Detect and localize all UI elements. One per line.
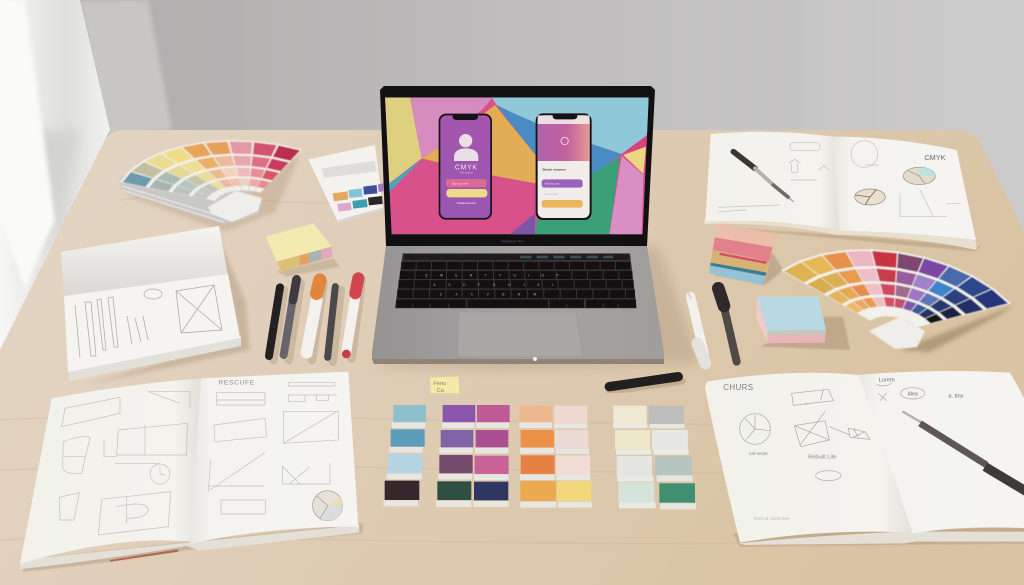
phone mockup: login	[439, 114, 492, 220]
marker: orange	[307, 300, 317, 353]
right page	[857, 371, 1024, 533]
wireframe sketches	[59, 383, 338, 535]
colour fan: left	[101, 128, 332, 232]
keyboard	[395, 253, 637, 308]
marker: black	[269, 287, 280, 356]
wall	[0, 0, 1024, 240]
marker: orange cap	[317, 280, 320, 293]
laptop base	[372, 246, 664, 360]
phone mockup: sign in	[536, 113, 592, 220]
keyboard: QWERTYUIOP	[425, 274, 571, 278]
page heading right: Lorem	[879, 378, 895, 384]
pen	[733, 152, 793, 202]
left page	[705, 373, 913, 543]
inline note: Idea	[907, 391, 918, 397]
wooden table	[0, 130, 1024, 585]
app title: CMYK	[455, 165, 478, 172]
fan rivet end	[869, 317, 925, 349]
black marker lying flat	[609, 377, 682, 391]
laptop lid	[380, 86, 655, 246]
swatch column: blues	[383, 405, 426, 506]
sketches	[718, 141, 960, 217]
sticky note label	[430, 377, 459, 394]
helper line: Need to login	[544, 193, 558, 196]
swatch column: purples	[436, 405, 475, 507]
keyboard: ASDFGHJKL	[433, 283, 567, 287]
avatar icon	[454, 134, 478, 161]
caption left: crit tests	[749, 451, 768, 457]
swatch column: greys and green	[649, 406, 696, 509]
sticky note label: Ca	[437, 388, 445, 394]
marker: grey cap	[293, 279, 297, 300]
form heading: Sketch structure	[542, 168, 566, 172]
group of markers	[269, 278, 362, 362]
swatch column: pale pinks and yellow	[554, 406, 592, 508]
swatch column: creams	[613, 406, 656, 508]
swatch column: magentas	[473, 405, 510, 507]
chart sketches	[740, 383, 925, 481]
tagline: Get started	[460, 171, 473, 175]
purple input: Add account	[545, 182, 560, 186]
marker: red cap	[355, 278, 358, 293]
marker: grey	[284, 280, 296, 355]
marker: dark grey	[328, 287, 335, 357]
pie chart sketch	[313, 491, 343, 521]
white pen	[688, 293, 705, 363]
colour fan: right	[778, 235, 1015, 352]
page heading left: CHURS	[723, 383, 753, 392]
top-right notebook with charts	[704, 132, 980, 252]
sticky note stack striped	[709, 224, 783, 285]
sticky note block	[266, 223, 340, 277]
faded note: Roct & sketches	[754, 516, 790, 522]
caption centre: Rebuilt Lite	[808, 454, 836, 460]
notebook header: CMYK	[924, 153, 946, 162]
marker: red tip	[342, 350, 351, 358]
footer link: Create account	[457, 201, 476, 205]
small sketchbook	[61, 226, 250, 385]
laptop brand label: MacBook Pro	[502, 239, 524, 243]
orange button	[542, 200, 583, 208]
inline note right: a. tiny	[948, 393, 964, 399]
fan rivet end	[208, 191, 262, 222]
pink input field: Sign up now	[452, 181, 469, 185]
colour palette card	[308, 145, 383, 223]
pie chart sketches	[855, 167, 935, 205]
bottom-left notebook	[20, 372, 363, 572]
keyboard: ZXCVBNM	[440, 293, 550, 297]
yellow button	[446, 189, 487, 197]
swatch column: oranges	[519, 406, 556, 508]
colour swatch grid	[383, 405, 696, 509]
sticky note stack blue	[756, 297, 850, 350]
pen	[903, 412, 1024, 492]
marker: red body	[346, 298, 355, 352]
laptop	[372, 86, 700, 370]
right page	[190, 372, 358, 544]
page heading: RESCUFE	[218, 379, 255, 386]
dark marker	[718, 288, 737, 362]
sticky note label: Fenu	[433, 381, 446, 387]
left page	[20, 378, 202, 564]
bottom-right notebook	[705, 371, 1024, 547]
laptop screen wallpaper	[383, 96, 650, 236]
left page	[705, 132, 840, 230]
right page	[833, 137, 976, 240]
power indicator	[533, 357, 537, 361]
window curtain	[0, 0, 172, 350]
